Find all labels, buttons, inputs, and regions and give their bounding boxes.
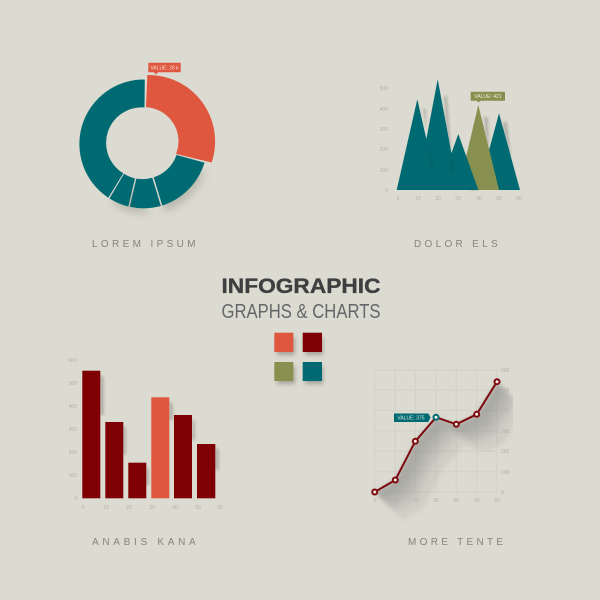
axis labels: 50 bbox=[195, 505, 201, 511]
axis labels: 300 bbox=[501, 429, 510, 435]
callout: value 421: VALUE: 421 bbox=[474, 94, 502, 100]
segment: small teal 1 bbox=[110, 174, 135, 206]
axis labels: 0 bbox=[501, 490, 504, 496]
axis labels: 400 bbox=[69, 404, 77, 410]
axis labels: 30 bbox=[149, 505, 155, 511]
axis labels: 50 bbox=[474, 498, 480, 504]
data line bbox=[375, 382, 497, 492]
axis labels: 20 bbox=[413, 498, 419, 504]
peak 30 bbox=[438, 134, 478, 190]
legend: teal bbox=[303, 362, 322, 381]
segment: small teal 3 bbox=[154, 155, 204, 206]
title: INFOGRAPHIC bbox=[222, 274, 380, 298]
callout: value 375: VALUE: 375 bbox=[397, 416, 425, 422]
axis labels: 500 bbox=[380, 86, 388, 92]
axis labels: 400 bbox=[501, 408, 510, 414]
mountain chart bbox=[380, 79, 522, 202]
axis labels bbox=[374, 368, 510, 504]
axis labels: 50 bbox=[496, 196, 502, 202]
axis labels: 0 bbox=[385, 188, 388, 194]
segment: small teal 2 bbox=[130, 178, 161, 208]
label: more tente: MORE TENTE bbox=[408, 537, 506, 548]
axis labels: 20 bbox=[435, 196, 441, 202]
axis labels: 0 bbox=[74, 496, 77, 502]
axis labels: 10 bbox=[415, 196, 421, 202]
data points bbox=[372, 379, 500, 494]
axis labels: 30 bbox=[433, 498, 439, 504]
axis labels: 0 bbox=[82, 505, 85, 511]
axis labels: 40 bbox=[172, 505, 178, 511]
axis labels: 60 bbox=[516, 196, 522, 202]
axis labels: 30 bbox=[455, 196, 461, 202]
segment: large teal bbox=[79, 79, 145, 198]
axis labels: 40 bbox=[453, 498, 459, 504]
axis labels: 0 bbox=[374, 498, 377, 504]
callout: value 375 bbox=[394, 414, 430, 422]
axis labels: 100 bbox=[501, 470, 510, 476]
legend: red bbox=[274, 333, 293, 352]
axis labels: 200 bbox=[380, 147, 388, 153]
axis labels: 0 bbox=[397, 196, 400, 202]
axis labels bbox=[69, 358, 223, 511]
axis labels: 600 bbox=[501, 368, 510, 374]
axis labels: 100 bbox=[69, 473, 77, 479]
axis labels: 60 bbox=[494, 498, 500, 504]
callout: value 28k: VALUE: 28 k bbox=[150, 66, 179, 72]
axis labels: 300 bbox=[69, 427, 77, 433]
callout: value 421 bbox=[471, 92, 505, 102]
axis labels: 500 bbox=[501, 388, 510, 394]
peak 20 bbox=[417, 79, 458, 190]
axis labels: 300 bbox=[380, 127, 388, 133]
bar shadows bbox=[100, 374, 219, 485]
peak overlap shading bbox=[427, 142, 454, 170]
legend: maroon bbox=[303, 333, 322, 352]
axis labels: 400 bbox=[380, 107, 388, 113]
label: dolor els: DOLOR ELS bbox=[414, 239, 501, 250]
axis labels: 10 bbox=[393, 498, 399, 504]
donut chart bbox=[79, 63, 215, 214]
subtitle: GRAPHS & CHARTS bbox=[222, 301, 380, 323]
label: anabis kana: ANABIS KANA bbox=[92, 537, 199, 548]
segment: red highlighted bbox=[146, 75, 215, 162]
line chart bbox=[372, 368, 525, 520]
axis labels: 200 bbox=[69, 450, 77, 456]
shadow on olive bbox=[464, 150, 478, 190]
axis labels: 500 bbox=[69, 381, 77, 387]
legend: olive bbox=[274, 362, 293, 381]
axis labels: 60 bbox=[217, 505, 223, 511]
peak shadows bbox=[423, 96, 511, 158]
label: lorem ipsum: LOREM IPSUM bbox=[92, 239, 199, 250]
bars bbox=[82, 371, 215, 498]
bar chart bbox=[69, 358, 223, 511]
axis labels: 40 bbox=[476, 196, 482, 202]
axis labels: 200 bbox=[501, 449, 510, 455]
axis labels: 100 bbox=[380, 168, 388, 174]
long shadow bbox=[376, 383, 513, 518]
axis labels bbox=[380, 86, 522, 202]
axis labels: 20 bbox=[126, 505, 132, 511]
legend squares bbox=[274, 333, 323, 384]
peak 40 olive bbox=[458, 105, 499, 190]
callout: value 28k bbox=[148, 63, 181, 74]
peak 10 bbox=[397, 99, 438, 190]
grid bbox=[375, 370, 497, 492]
axis labels: 600 bbox=[69, 358, 77, 364]
peak 50 bbox=[478, 113, 520, 190]
axis labels: 10 bbox=[103, 505, 109, 511]
